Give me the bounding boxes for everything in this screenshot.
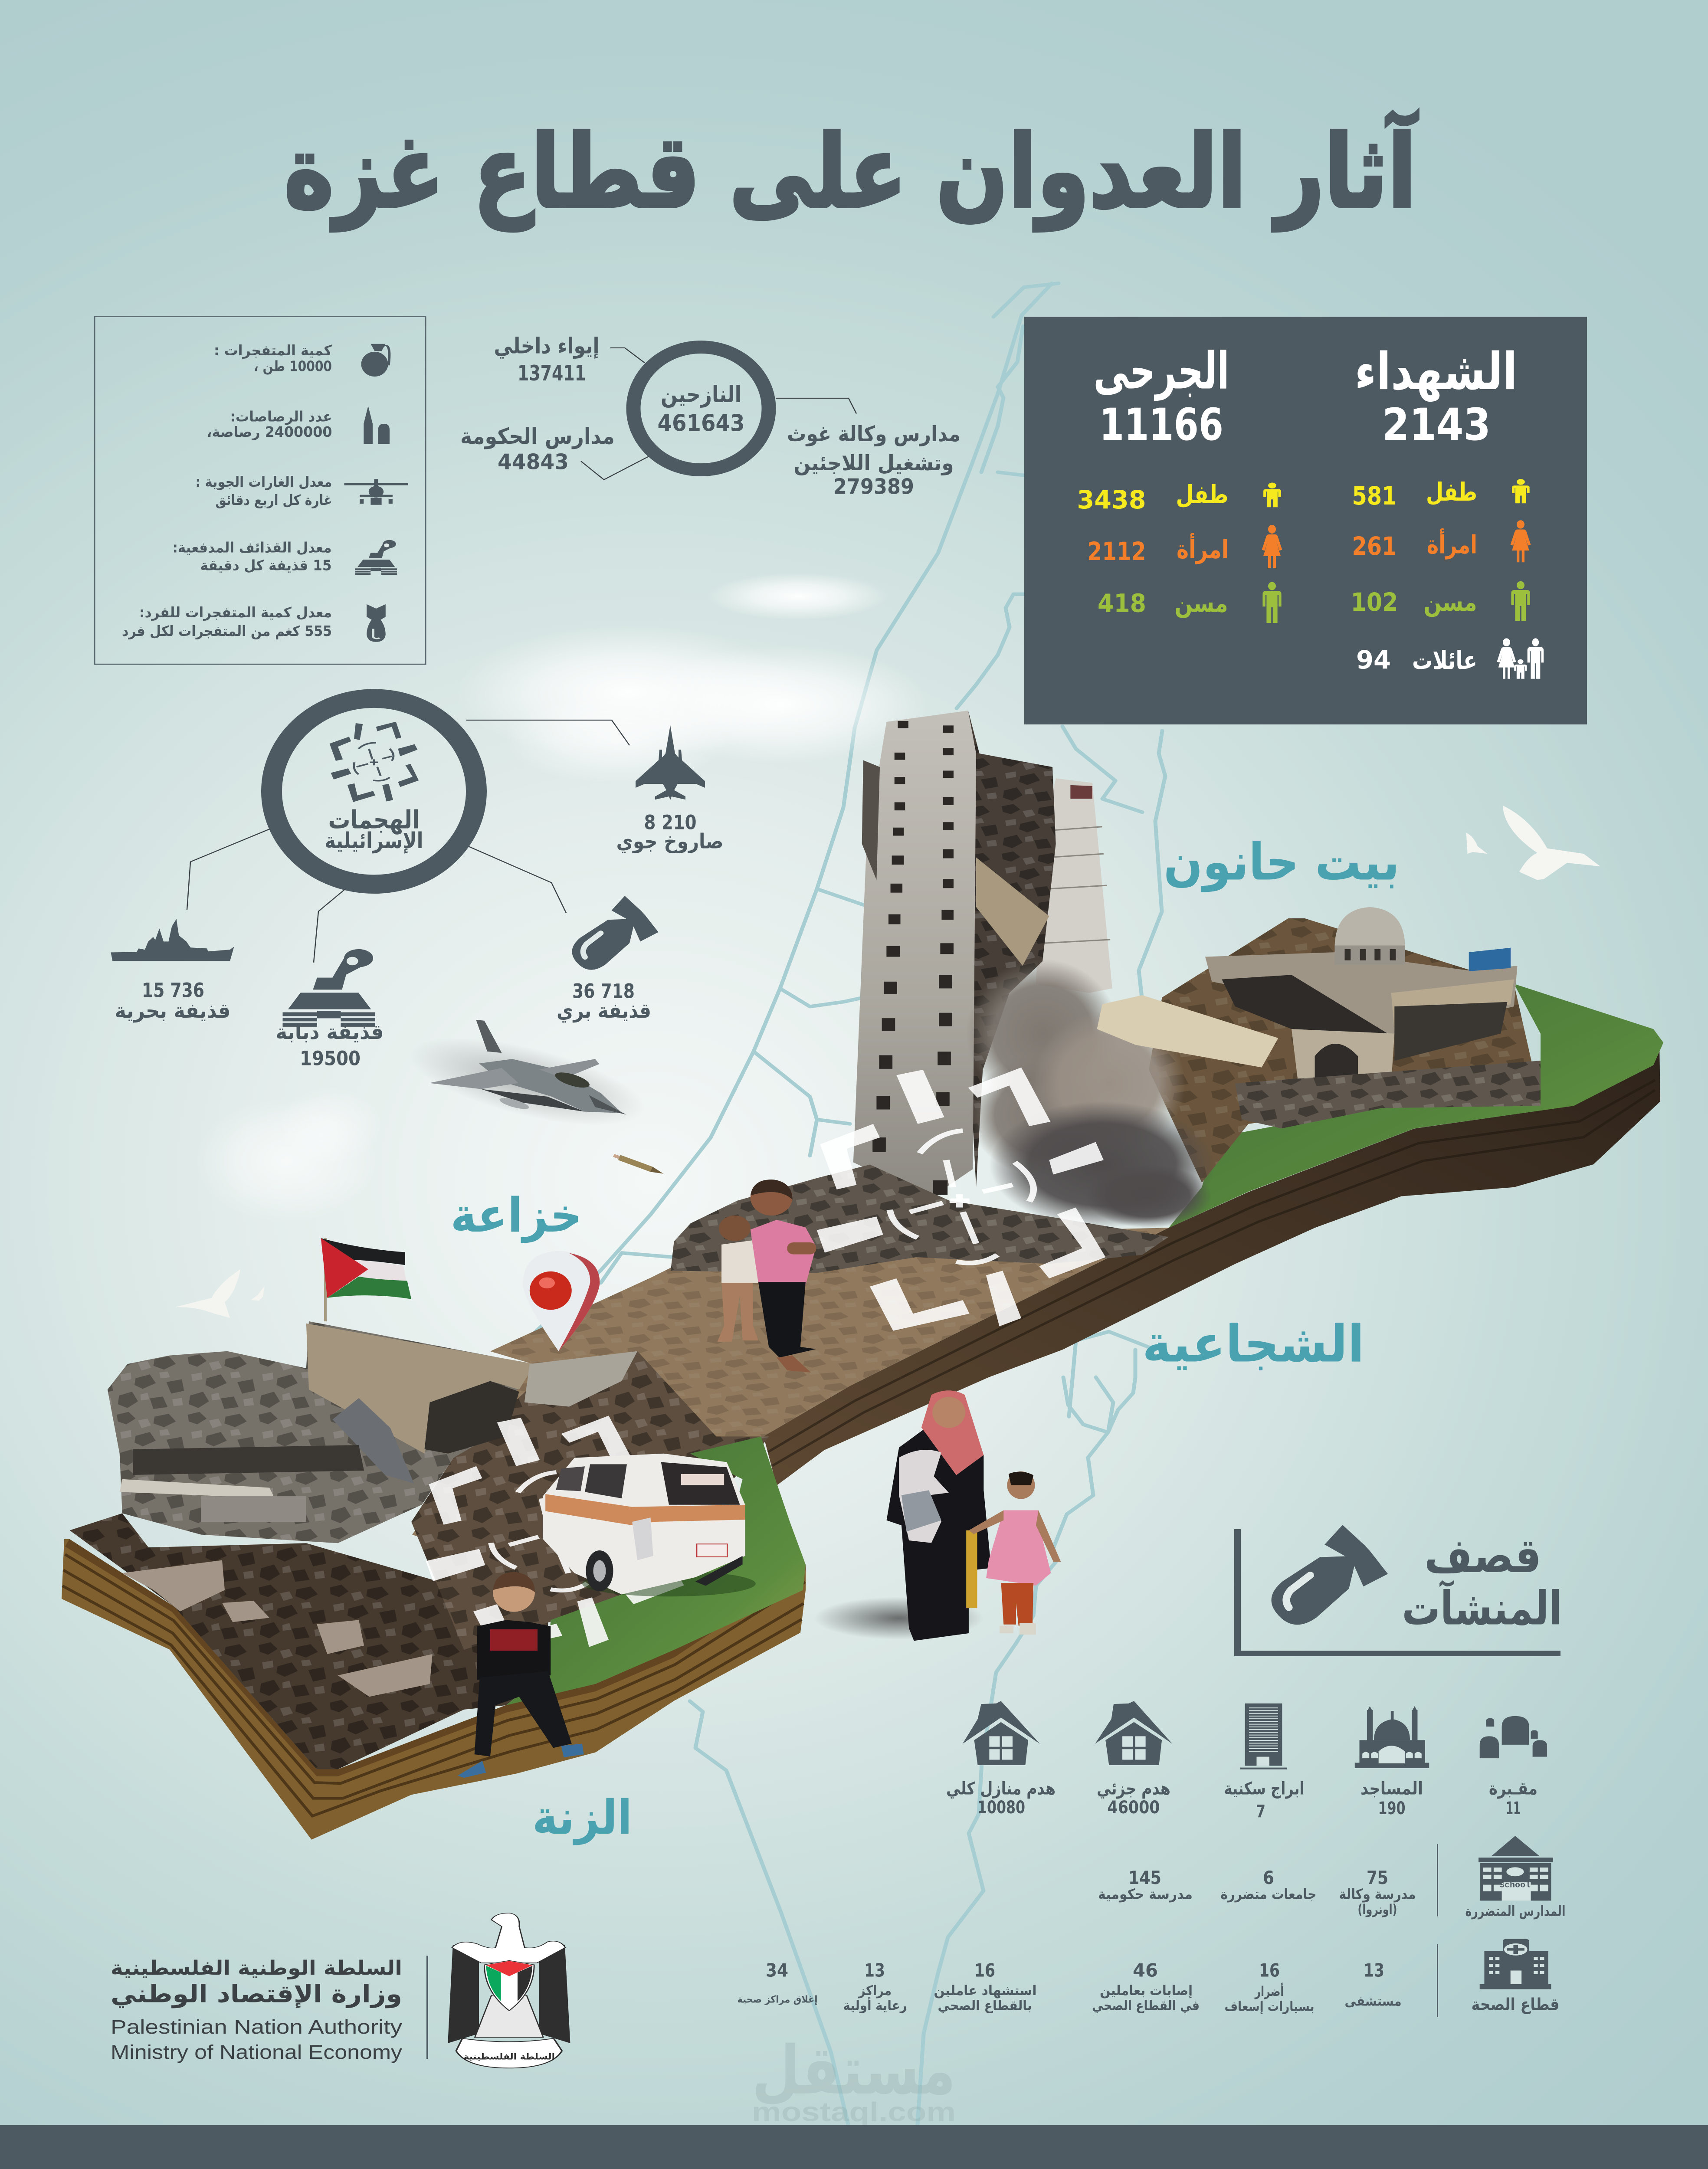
icon text: School sign: School: [1499, 1881, 1531, 1890]
figure: total demolition: [946, 1778, 1056, 1817]
figure: total demolition: هدم منازل كلي: [946, 1778, 1056, 1799]
martyrs: families: [1356, 638, 1544, 679]
figure: land shells: [557, 980, 651, 1023]
figure: naval shells: قذيفة بحرية: [115, 999, 231, 1023]
heading: martyrs: الشهداء: [1354, 342, 1517, 402]
heading: martyrs: [1354, 342, 1518, 451]
figure: primary care: مراكز: [858, 1983, 892, 1999]
footer bar: [0, 2125, 1708, 2169]
figure: towers: [1224, 1778, 1304, 1822]
heading: attacks: [325, 805, 423, 853]
heading: martyrs: 2143: [1382, 400, 1491, 451]
fact: explosives: 10000 طن ،: [254, 358, 332, 375]
fact: explosives per person: [122, 605, 332, 639]
martyrs: families: عائلات: [1412, 646, 1477, 675]
label: Khuzaa: خزاعة: [450, 1188, 582, 1243]
martyrs: children: [1352, 478, 1530, 511]
figure: hospitals: 13: [1364, 1960, 1384, 1981]
panel: Israeli attacks: [111, 698, 724, 1070]
figure: towers: ابراج سكنية: [1224, 1778, 1304, 1799]
figure: ambulances: 16: [1259, 1960, 1280, 1981]
logo: Palestinian eagle: [448, 1913, 570, 2068]
icon: bomb large: [1256, 1524, 1390, 1640]
figure: killed workers: استشهاد عاملين: [934, 1983, 1037, 1999]
martyrs: elderly: 102: [1351, 588, 1398, 617]
wounded: women: [1088, 525, 1282, 568]
heading: attacks: الهجمات: [328, 805, 420, 835]
wounded: elderly: مسن: [1174, 589, 1228, 618]
figure: injured workers: 46: [1133, 1960, 1158, 1981]
watermark: مستقل: [752, 2031, 956, 2110]
watermark: mostaql.com: [752, 2097, 956, 2127]
photo: damaged mosque: [1097, 907, 1541, 1128]
icon: bomb small: [367, 604, 386, 642]
F-16 jet photo: [394, 1019, 659, 1143]
clouds: [195, 573, 928, 1224]
figure: killed workers: [934, 1960, 1037, 2013]
photo: rubble pile at tower base: [671, 1165, 1169, 1273]
figure: government schools: 145: [1128, 1868, 1161, 1889]
panel: displaced people: [460, 333, 961, 499]
wounded: women: امرأة: [1177, 533, 1229, 564]
figure: land shells: 36 718: [572, 980, 635, 1003]
ministry text block: وزارة الإقتصاد الوطني: [111, 1979, 402, 2008]
figure: displaced total: النازحين: [661, 382, 741, 408]
figure: ambulances: أضرار: [1254, 1982, 1284, 1999]
figure: cemeteries: 11: [1506, 1798, 1521, 1818]
heading text: [1402, 1529, 1562, 1635]
labels: place names: [450, 832, 1400, 1845]
leader lines: [187, 720, 629, 963]
icon: house partial: [1095, 1701, 1172, 1765]
fact: shells: 15 قذيفة كل دقيقة: [200, 557, 331, 574]
figure: primary care: رعاية أولية: [843, 1996, 907, 2013]
label: Zanna: الزنة: [532, 1790, 632, 1845]
circle: displaced total: [633, 347, 769, 470]
figure: injured workers: في القطاع الصحي: [1092, 1998, 1200, 2013]
logo divider: [426, 1956, 428, 2059]
heading: wounded: 11166: [1099, 400, 1223, 451]
figure: air missiles: صاروخ جوي: [616, 829, 723, 854]
figure: partial demolition: 46000: [1107, 1797, 1160, 1817]
heading: attacks: الإسرائيلية: [325, 827, 423, 853]
figure: UNRWA schools: (اونروا): [1358, 1902, 1397, 1917]
slab side: southern block: [62, 1539, 806, 1840]
fact: bullets: [207, 409, 332, 440]
frame: [1234, 1529, 1560, 1656]
martyrs: women: امرأة: [1427, 528, 1477, 560]
surface: southern green end: [506, 1436, 806, 1705]
panel: explosives facts box: [95, 316, 426, 664]
icon: crosshair: [330, 722, 419, 802]
surface: dirt under mosque: [1149, 918, 1541, 1183]
figure: closed centres: 34: [766, 1960, 788, 1981]
ministry text block: السلطة الوطنية الفلسطينية: [111, 1957, 402, 1979]
ministry text block: Palestinian Nation Authority: [111, 2016, 402, 2038]
panel: damaged schools: [1098, 1836, 1566, 1920]
figure: internal shelter: إيواء داخلي: [494, 333, 599, 359]
heading text: قصف: [1424, 1529, 1541, 1584]
wounded: women: 2112: [1088, 537, 1146, 566]
photo: birds left: [175, 1269, 264, 1318]
figure: air missiles: 8 210: [644, 811, 697, 834]
label: Beit Hanoun: بيت حانون: [1164, 832, 1400, 892]
ministry text block: [111, 1957, 402, 2063]
icon: jet silhouette: [636, 725, 705, 800]
land slab: Gaza strip: [62, 918, 1663, 1840]
figure: injured workers: [1092, 1960, 1200, 2013]
circle: attacks: [272, 698, 476, 884]
figure: closed centres: إغلاق مراكز صحية: [738, 1993, 817, 2005]
photo: Palestinian flag: [321, 1238, 411, 1321]
figure: UNRWA schools: مدرسة وكالة: [1339, 1886, 1416, 1903]
surface: dirt middle: [412, 1228, 1169, 1558]
icon: tank: [283, 949, 375, 1027]
building block on rubble: [120, 1324, 637, 1697]
figure: UNRWA schools: [1339, 1868, 1416, 1917]
fact: explosives: [214, 343, 332, 375]
figure: land shells: قذيفة بري: [557, 999, 651, 1023]
target overlay: south: [426, 1415, 684, 1651]
figure: killed workers: 16: [974, 1960, 995, 1981]
figure: mosques: 190: [1378, 1798, 1406, 1818]
icon: bullets: [364, 406, 390, 444]
martyrs: children: طفل: [1426, 478, 1477, 507]
wounded: children: طفل: [1176, 480, 1229, 509]
figure: air missiles: [616, 811, 724, 854]
fact: shells: [173, 540, 331, 574]
figure: mosques: المساجد: [1360, 1778, 1423, 1799]
icon: house total: [963, 1701, 1040, 1765]
label: damaged schools: المدارس المتضررة: [1465, 1903, 1566, 1920]
figure: government schools: 44843: [498, 450, 569, 475]
surface: northern green end: [1169, 984, 1663, 1228]
surface: southern dark rubble: [70, 1513, 548, 1769]
figure: tank shells: قذيفة دبابة: [276, 1020, 384, 1044]
icon: warship: [111, 919, 234, 961]
martyrs: women: [1352, 520, 1531, 562]
icon: location pin: [523, 1251, 600, 1351]
figure: government schools: مدارس الحكومة: [460, 423, 615, 449]
target overlay: north: [817, 1068, 1105, 1331]
fact: bullets: عدد الرصاصات:: [230, 409, 332, 425]
figure: naval shells: [115, 980, 231, 1023]
figure: government schools: [460, 423, 615, 475]
fact: shells: معدل القذائف المدفعية:: [173, 540, 331, 556]
leader lines: [581, 348, 856, 480]
figure: government schools: مدرسة حكومية: [1098, 1886, 1193, 1903]
figure: partial demolition: هدم جزئي: [1097, 1778, 1170, 1799]
wounded: children: [1077, 480, 1281, 514]
section heading: bombing of facilities: [1234, 1524, 1562, 1656]
heading: wounded: [1093, 341, 1229, 451]
figure: injured workers: إصابات بعاملين: [1100, 1983, 1193, 1999]
icon: tank small: [355, 540, 397, 575]
figure: killed workers: بالقطاع الصحي: [938, 1998, 1032, 2013]
figure: displaced total: 461643: [658, 410, 745, 437]
photo: sitting boy: [458, 1572, 584, 1778]
icon: bomb: [561, 895, 660, 981]
figure: cemeteries: [1489, 1778, 1538, 1818]
figure: cemeteries: مقـبرة: [1489, 1778, 1538, 1799]
icon: helicopter: [344, 479, 408, 505]
fact: bullets: 2400000 رصاصة،: [207, 424, 332, 440]
figure: hospitals: مستشفى: [1344, 1993, 1401, 2009]
figure: naval shells: 15 736: [142, 980, 204, 1002]
panel: facilities row: [946, 1701, 1547, 1822]
martyrs: children: 581: [1352, 482, 1397, 511]
martyrs: elderly: [1351, 581, 1530, 621]
figure: primary care: [843, 1960, 907, 2013]
figure: displaced total: [658, 382, 745, 437]
map of Palestine outline: [521, 283, 1165, 2124]
surface: lower dark dirt patch: [411, 1351, 769, 1650]
ministry text block: Ministry of National Economy: [111, 2041, 402, 2063]
icon: hospital: [1480, 1939, 1551, 1989]
divider: [1437, 1944, 1438, 2017]
divider: [1437, 1844, 1438, 1917]
fact: air raids: غارة كل اربع دقائق: [215, 492, 332, 508]
label: Shujaiyya: الشجاعية: [1142, 1314, 1364, 1374]
figure: mosques: [1360, 1778, 1423, 1818]
surface: grey collapsed building: [108, 1321, 532, 1543]
figure: internal shelter: 137411: [518, 361, 586, 386]
figure: UNRWA schools: 279389: [833, 475, 914, 499]
figure: ambulances: بسيارات إسعاف: [1224, 1999, 1315, 2015]
icon: mosque: [1355, 1706, 1429, 1768]
photo: birds right: [1466, 806, 1600, 880]
photo: two children on dirt: [717, 1180, 816, 1373]
icon: school: [1479, 1836, 1553, 1900]
figure: internal shelter: [494, 333, 599, 386]
smoke plume: [966, 959, 1215, 1228]
figure: tank shells: [276, 1020, 384, 1070]
figure: hospitals: [1344, 1960, 1401, 2009]
watermark: [752, 2031, 956, 2127]
panel: health sector: [738, 1939, 1559, 2017]
figure: closed centres: [738, 1960, 817, 2005]
icon: grenade: [361, 344, 389, 377]
photo: damaged ambulance: [543, 1454, 756, 1596]
figure: UNRWA schools: 75: [1367, 1868, 1388, 1889]
wounded: children: 3438: [1077, 485, 1146, 514]
martyrs: families: 94: [1356, 645, 1391, 675]
slab side: northern strip: [764, 1043, 1660, 1485]
photo: bombed tower: [853, 711, 1112, 1199]
fact: explosives per person: 555 كغم من المتفجرات لكل فرد: [122, 623, 332, 639]
figure: universities: 6: [1263, 1868, 1274, 1889]
martyrs: elderly: مسن: [1424, 588, 1477, 617]
figure: primary care: 13: [864, 1960, 885, 1981]
fact: air raids: معدل الغارات الجوية :: [195, 474, 332, 491]
icon: residential tower: [1240, 1704, 1287, 1769]
martyrs: women: 261: [1352, 532, 1397, 561]
figure: universities: جامعات متضررة: [1220, 1886, 1316, 1903]
label: health sector: قطاع الصحة: [1472, 1995, 1559, 2014]
figure: UNRWA schools: وتشغيل اللاجئين: [794, 451, 954, 475]
figure: universities: [1220, 1868, 1316, 1903]
heading text: المنشآت: [1402, 1580, 1562, 1635]
fact: air raids: [195, 474, 332, 508]
photo: mother and children: [814, 1390, 1061, 1641]
heading: wounded: الجرحى: [1093, 341, 1229, 401]
figure: ambulances: [1224, 1960, 1315, 2015]
panel: casualties: [1024, 317, 1587, 724]
rocket: [613, 1153, 665, 1176]
figure: UNRWA schools: [787, 422, 961, 499]
fact: explosives: كمية المتفجرات :: [214, 343, 332, 359]
figure: towers: 7: [1256, 1801, 1265, 1822]
icon: cemetery: [1480, 1716, 1547, 1758]
fact: explosives per person: معدل كمية المتفجرات للفرد:: [139, 605, 332, 621]
figure: partial demolition: [1097, 1778, 1170, 1817]
figure: tank shells: 19500: [300, 1048, 361, 1070]
figure: UNRWA schools: مدارس وكالة غوث: [787, 422, 961, 446]
wounded: elderly: 418: [1098, 589, 1146, 618]
figure: total demolition: 10080: [977, 1797, 1025, 1817]
figure: government schools: [1098, 1868, 1193, 1903]
wounded: elderly: [1098, 582, 1282, 623]
logo: Palestinian eagle: السلطة الفلسطينية: [464, 2052, 555, 2061]
